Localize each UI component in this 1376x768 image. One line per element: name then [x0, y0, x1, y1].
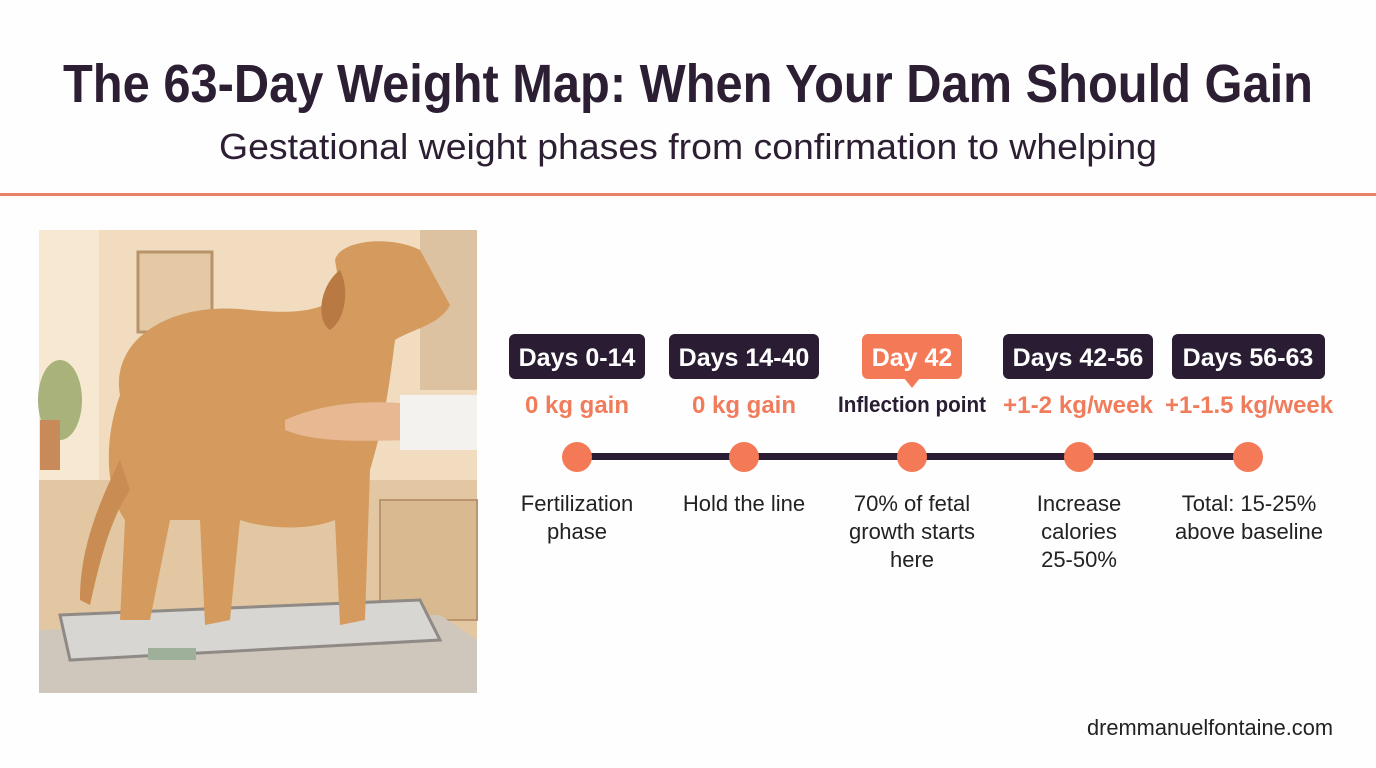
- phase 4: 25-50%: [1041, 547, 1117, 572]
- phase 5: above baseline: [1175, 519, 1323, 544]
- phase 3: day 42: growth starts: [849, 519, 975, 544]
- phase 1: phase: [547, 519, 607, 544]
- phase 5: Total: 15-25%: [1182, 491, 1316, 516]
- phase 4: calories: [1041, 519, 1117, 544]
- phase 3: day 42: Day 42: [872, 344, 952, 372]
- phase 2: [669, 334, 819, 516]
- phase 3: day 42: [838, 334, 987, 572]
- phase 2: 0 kg gain: [692, 392, 796, 419]
- phase 1: 0 kg gain: [525, 392, 629, 419]
- phase 1: [509, 334, 645, 544]
- phase 1: Fertilization: [521, 491, 633, 516]
- phase 4: +1-2 kg/week: [1003, 392, 1154, 419]
- phase 3: day 42: here: [890, 547, 934, 572]
- phase 4: Increase: [1037, 491, 1121, 516]
- phase 4: [1003, 334, 1154, 572]
- phase 1: Days 0-14: [519, 344, 635, 372]
- timeline line: [577, 453, 1248, 460]
- footer url: dremmanuelfontaine.com: [1087, 715, 1333, 740]
- phase 5: +1-1.5 kg/week: [1165, 392, 1334, 419]
- subtitle: Gestational weight phases from confirmation to whelping: [219, 126, 1157, 167]
- phase 3: day 42: 70% of fetal: [854, 491, 970, 516]
- phase 3: day 42: Inflection point: [838, 392, 987, 417]
- phase 5: Days 56-63: [1183, 344, 1313, 372]
- phase 4: Days 42-56: [1013, 344, 1143, 372]
- phase 5: [1165, 334, 1334, 544]
- phase 2: Hold the line: [683, 491, 805, 516]
- illustration: dog on scale: [38, 230, 477, 693]
- phase 2: Days 14-40: [679, 344, 809, 372]
